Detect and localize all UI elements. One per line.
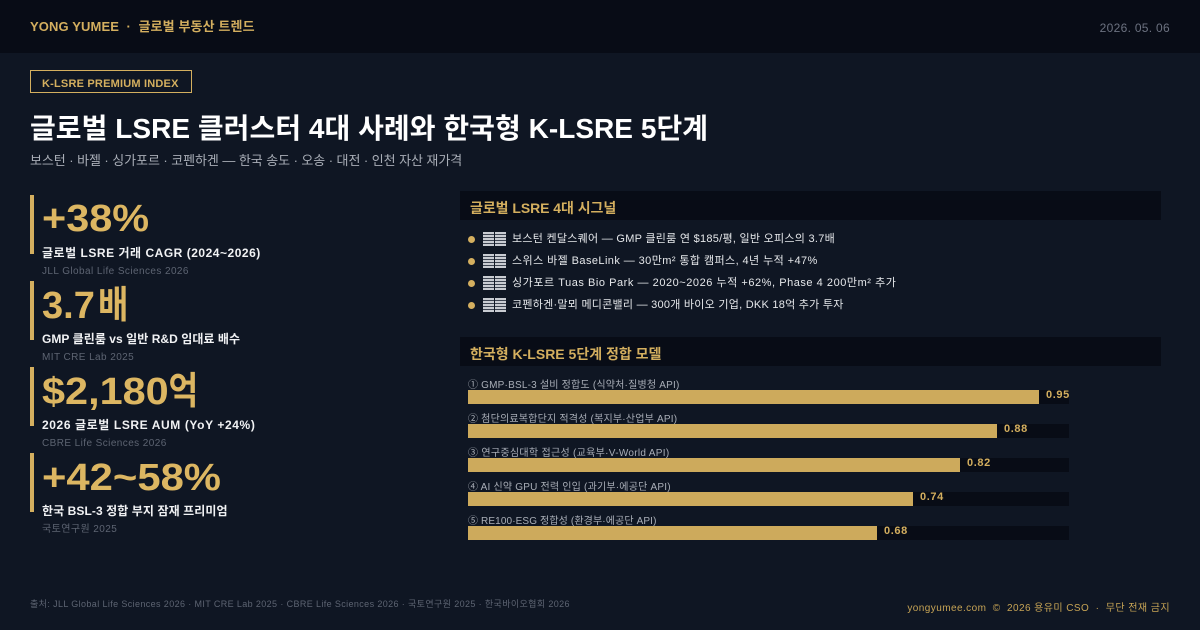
- heading: signals: [460, 191, 1161, 220]
- brand title: YONG YUMEE · 글로벌 부동산 트렌드: [30, 19, 255, 34]
- signal 1: 보스턴 켄달스퀘어 — GMP 클린룸 연 $185/평, 일반 오피스의 3.7배: [512, 233, 835, 245]
- bullet 2: [468, 258, 475, 265]
- subtitle: 보스턴 · 바젤 · 싱가포르 · 코펜하겐 — 한국 송도 · 오송 · 대전 · 인천 자산 재가격: [30, 153, 462, 168]
- bar 3 fill: [468, 458, 960, 472]
- bar 1 label: ① GMP·BSL-3 설비 정합도 (식약처·질병청 API): [468, 380, 680, 391]
- bar 2 track: [468, 424, 1069, 438]
- bar 3 value: 0.82: [967, 457, 991, 469]
- signal 4: 코펜하겐·말뫼 메디콘밸리 — 300개 바이오 기업, DKK 18억 추가 투자: [512, 299, 844, 311]
- bar 1 value: 0.95: [1046, 389, 1070, 401]
- footer sources: 출처: JLL Global Life Sciences 2026 · MIT CRE Lab 2025 · CBRE Life Sciences 2026 · 국토연구원 2025 · 한국바이오협회 2026: [30, 599, 570, 609]
- heading: model: [460, 337, 1161, 366]
- footer credit: yongyumee.com © 2026 용유미 CSO · 무단 전재 금지: [907, 603, 1170, 614]
- icon: lines 1: [483, 232, 506, 246]
- bar 3 track: [468, 458, 1069, 472]
- bullet 4: [468, 302, 475, 309]
- bar 3 label: ③ 연구중심대학 접근성 (교육부·V-World API): [468, 448, 669, 459]
- KPI 2 value: 배: [98, 285, 128, 327]
- KPI accent bar 4: [30, 453, 34, 512]
- signal 2: 스위스 바젤 BaseLink — 30만m² 통합 캠퍼스, 4년 누적 +47%: [512, 255, 818, 267]
- heading: model: 한국형 K-LSRE 5단계 정합 모델: [470, 346, 661, 362]
- KPI 2 label: GMP 클린룸 vs 일반 R&D 임대료 배수: [42, 332, 240, 346]
- bar 1 track: [468, 390, 1069, 404]
- KPI 3 label: 2026 글로벌 LSRE AUM (YoY +24%): [42, 418, 255, 432]
- badge: [30, 70, 192, 93]
- KPI 4 value: +42~58%: [42, 457, 221, 499]
- header bar: [0, 0, 1200, 53]
- bar chart: [468, 378, 1071, 541]
- bar 1 fill: [468, 390, 1039, 404]
- KPI 1 source: JLL Global Life Sciences 2026: [42, 266, 189, 277]
- icon: lines 3: [483, 276, 506, 290]
- KPI accent bar 3: [30, 367, 34, 426]
- bar 5 fill: [468, 526, 877, 540]
- signal 3: 싱가포르 Tuas Bio Park — 2020~2026 누적 +62%, Phase 4 200만m² 추가: [512, 277, 896, 289]
- bar 2 fill: [468, 424, 997, 438]
- bar 5 label: ⑤ RE100·ESG 정합성 (환경부·에공단 API): [468, 516, 657, 527]
- icon: lines 4: [483, 298, 506, 312]
- icon: lines 2: [483, 254, 506, 268]
- KPI 1 label: 글로벌 LSRE 거래 CAGR (2024~2026): [42, 246, 261, 260]
- bar 4 track: [468, 492, 1069, 506]
- bar 5 track: [468, 526, 1069, 540]
- bar 4 label: ④ AI 신약 GPU 전력 인입 (과기부·에공단 API): [468, 482, 671, 493]
- KPI 2 value: 3.7: [42, 285, 95, 327]
- KPI 2 source: MIT CRE Lab 2025: [42, 352, 134, 363]
- KPI 1 value: +38%: [42, 198, 149, 240]
- KPI 4 source: 국토연구원 2025: [42, 524, 117, 535]
- KPI column: [30, 195, 34, 512]
- bar 5 value: 0.68: [884, 525, 908, 537]
- badge: K-LSRE PREMIUM INDEX: [42, 78, 179, 90]
- KPI 2 value: [42, 285, 128, 327]
- bar 4 fill: [468, 492, 913, 506]
- date: 2026. 05. 06: [1100, 21, 1170, 35]
- KPI accent bar 2: [30, 281, 34, 340]
- KPI 3 value: $2,180: [42, 371, 169, 413]
- KPI 3 value: 억: [169, 371, 198, 413]
- KPI accent bar 1: [30, 195, 34, 254]
- bullet 1: [468, 236, 475, 243]
- bar 2 label: ② 첨단의료복합단지 적격성 (복지부·산업부 API): [468, 414, 677, 425]
- main title: 글로벌 LSRE 클러스터 4대 사례와 한국형 K-LSRE 5단계: [30, 113, 708, 144]
- KPI 3 source: CBRE Life Sciences 2026: [42, 438, 167, 449]
- KPI 4 label: 한국 BSL-3 정합 부지 잠재 프리미엄: [42, 504, 228, 518]
- heading: signals: 글로벌 LSRE 4대 시그널: [470, 200, 616, 216]
- bar 4 value: 0.74: [920, 491, 944, 503]
- bar 2 value: 0.88: [1004, 423, 1028, 435]
- bullet 3: [468, 280, 475, 287]
